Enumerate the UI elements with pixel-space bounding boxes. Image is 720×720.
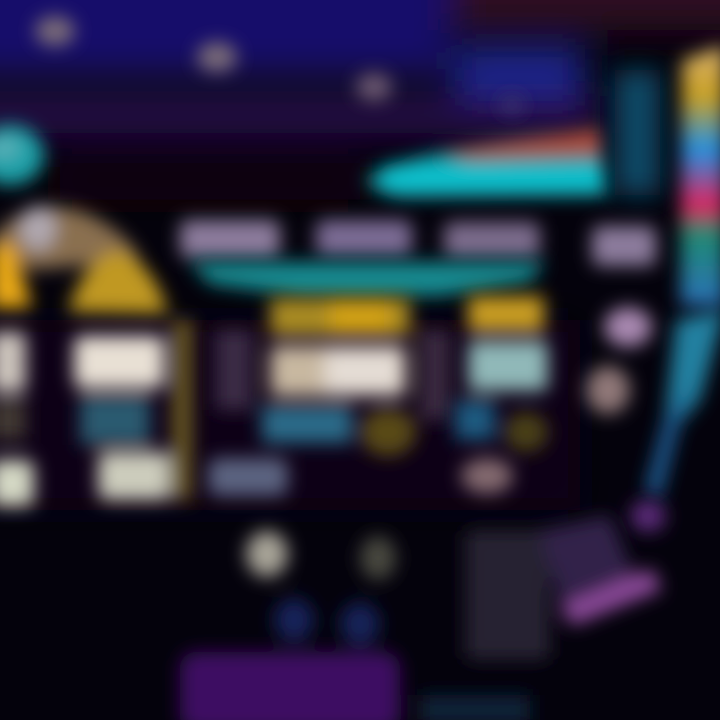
ceiling [0, 0, 720, 510]
left arched machines [0, 206, 192, 506]
ceiling lights [35, 16, 524, 114]
rainbow column [615, 70, 660, 195]
side panels [586, 307, 666, 532]
teal band [190, 262, 545, 296]
top panels [180, 220, 656, 266]
right machine [455, 296, 548, 494]
centre machine [208, 298, 450, 496]
bottom details [180, 515, 662, 720]
teal sign right [365, 128, 608, 198]
teal sign left [0, 125, 44, 185]
